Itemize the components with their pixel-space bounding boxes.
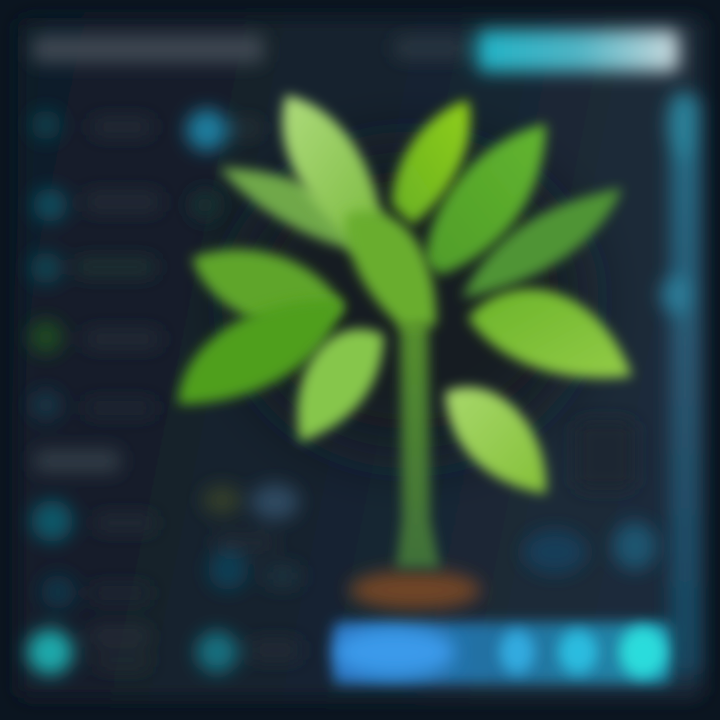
leaf: right large [468,289,632,378]
lower icons [31,500,73,542]
leaf: left lower lobe [178,300,342,404]
leaf: left upper lobe [192,249,345,335]
header label [395,38,465,58]
icon: plant [178,95,632,610]
leaf: upper left [282,95,382,235]
left column list [27,110,160,675]
heading bar [32,35,264,63]
soil [349,570,481,610]
header [32,30,679,72]
leaf: far right thin [462,188,622,298]
header button [477,30,679,72]
plant shadow glow [240,150,580,450]
middle column items [186,109,300,673]
leaf: lower right [445,387,546,494]
right column items [523,420,657,574]
side column: gauge [661,91,700,675]
leaf: centre [345,211,436,328]
leaf: upper centre [392,100,470,225]
list icons [31,110,61,140]
list text [92,118,152,136]
stem [396,320,440,568]
section heading [35,450,120,472]
leaf: left thin [220,168,395,252]
bottom action bar [333,622,671,684]
leaf: upper right [425,124,546,275]
leaf: lower left [297,329,384,442]
